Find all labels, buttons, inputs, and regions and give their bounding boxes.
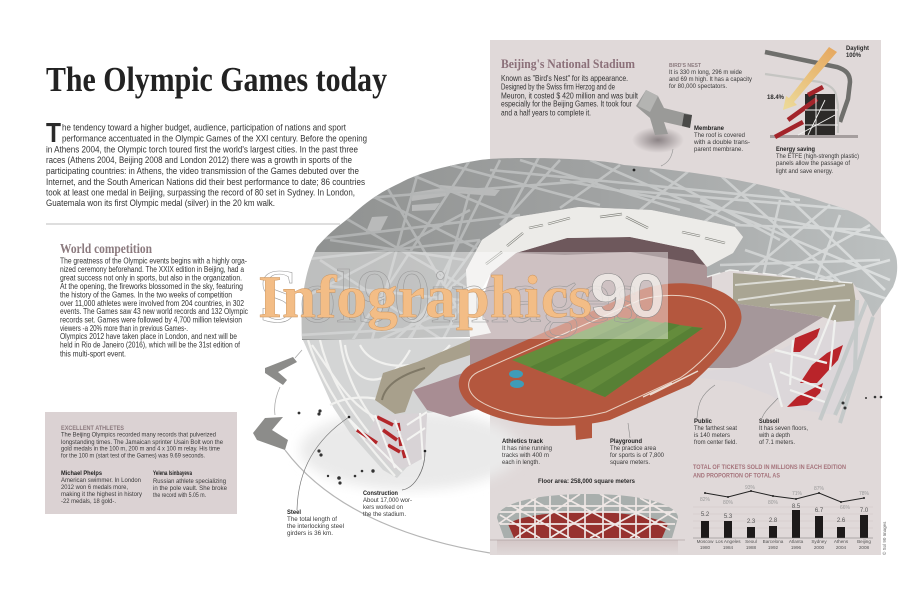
- illustration: stadium cutaway: [300, 155, 897, 478]
- credit: © Sol 90 Images: [881, 521, 887, 555]
- value labels: 7.0: [860, 508, 869, 514]
- athlete: Michael Phelps: making it the highest in history: [61, 491, 143, 498]
- inner white ring: [466, 207, 743, 337]
- label: daylight: Daylight: [846, 45, 869, 52]
- callout: Athletics track: Athletics track: [502, 438, 543, 445]
- callout: Public: is 140 meters: [694, 432, 730, 439]
- percentage labels: 80%: [723, 500, 734, 506]
- value labels: 8.5: [792, 504, 801, 510]
- axis labels: Atlanta: [789, 539, 804, 544]
- text block: World competition: nized ceremony beforehand. The XXIX edition in Beijing, had a: [60, 265, 245, 274]
- axis labels: 2008: [859, 545, 870, 550]
- panel: Beijing's National Stadium background: [490, 40, 881, 555]
- callout: Membrane: with a double trans-: [693, 139, 750, 146]
- athlete: Yelena Isinbayeva: Yelena Isinbayeva: [153, 470, 192, 477]
- axis labels: Athens: [834, 539, 849, 544]
- percentage labels: 71%: [792, 491, 803, 497]
- text block: stadium description: Meuron, it costed $ 420 million and was built: [501, 92, 639, 100]
- panel: Excellent athletes: for the 100 m (start test of the Games) was 9.69 seconds.: [61, 452, 205, 460]
- callout: Subsoil: Subsoil: [759, 418, 779, 425]
- right facade structure: [700, 300, 873, 423]
- label: 18.4%: 18.4%: [767, 94, 784, 101]
- track extension: [575, 414, 592, 440]
- athlete: Michael Phelps: 2012 won 6 medals more,: [61, 484, 128, 491]
- callout: Energy saving: light and save energy.: [776, 168, 833, 175]
- callout: Steel: the interlocking steel: [287, 523, 344, 530]
- watermark: Sol90images: [258, 255, 640, 339]
- callout: Athletics track: tracks with 400 m: [502, 452, 549, 459]
- text block: stadium description: Known as "Bird's Nest" for its appearance.: [501, 74, 628, 83]
- text block: World competition: viewers -a 20% more than in previous Games-.: [60, 324, 188, 333]
- roof edge highlight, right: [707, 270, 853, 283]
- callout: Subsoil: It has seven floors,: [759, 425, 808, 432]
- axis labels: 1980: [700, 545, 711, 550]
- text block: World competition: records set. Games were followed by 4,700 million television: [60, 316, 242, 324]
- label: floor area: Floor area: 258,000 square meters: [538, 478, 635, 485]
- callout: Public: Public: [694, 418, 712, 425]
- value labels: 5.3: [724, 514, 733, 520]
- text block: World competition: great success not only in sports, but also in the organization.: [60, 274, 242, 282]
- callout: Construction: the the stadium.: [363, 511, 406, 518]
- text block: World competition: Olympics 2012 have taken place in London, and next will be: [60, 332, 238, 341]
- callout: Public: from center field.: [694, 439, 737, 446]
- title: The Olympic Games today: [46, 60, 387, 99]
- callout: Athletics track: It has nine running: [502, 445, 552, 452]
- percentage labels: 80%: [768, 500, 779, 506]
- trend line: [705, 491, 864, 502]
- athlete: Yelena Isinbayeva: in the pole vault. She broke: [153, 485, 227, 492]
- diagram: energy saving cross-section: [765, 45, 869, 138]
- callout: Playground: square meters.: [610, 459, 650, 466]
- percentage labels: 87%: [814, 486, 825, 492]
- axis labels: Sydney: [811, 539, 827, 544]
- chart: tickets sold and proportion: AND PROPORTION OF TOTAL AS: [693, 472, 780, 480]
- chart title: TOTAL OF TICKETS SOLD IN MILLIONS IN EACH EDITION: [693, 464, 846, 471]
- callout: Subsoil: [758, 398, 808, 446]
- callout: Playground: The practice area: [610, 445, 656, 452]
- callout: Public: [694, 385, 737, 446]
- text block: World competition: this multi-sport event.: [60, 350, 126, 358]
- athlete: Yelena Isinbayeva: the record with 5.05 m.: [153, 492, 206, 499]
- text block: introduction: Guatemala won its first Olympic medal (silver) in the 20 km walk.: [46, 198, 275, 209]
- callout: Athletics track: each in length.: [502, 459, 540, 466]
- percentage labels: 93%: [745, 485, 756, 491]
- text block: World competition: events. The Games saw 43 new world records and 132 Olympic: [60, 307, 248, 316]
- text block: stadium description: [501, 74, 639, 118]
- text block: introduction: [46, 117, 367, 209]
- athlete: Michael Phelps: [61, 470, 143, 505]
- field: [512, 317, 703, 397]
- panel: Excellent athletes: The Beijing Olympics recorded many records that pulverized: [61, 432, 216, 438]
- watermark: Infographics: [258, 264, 592, 330]
- text block: World competition: held in Rio de Janeiro (2016), which will be the 31st edition of: [60, 340, 241, 350]
- diagram: energy saving cross-section: 100%: [846, 52, 861, 59]
- text block: stadium description: and a half years to complete it.: [501, 108, 591, 118]
- callout: Playground: for sports is of 7,800: [610, 452, 664, 459]
- axis labels: Moscow: [697, 539, 714, 544]
- athlete: Yelena Isinbayeva: Russian athlete specializing: [153, 478, 226, 485]
- percentage labels: [700, 485, 870, 511]
- text block: World competition: the history of the Games. In the two weeks of competition: [60, 290, 232, 300]
- seating bowl: [413, 237, 823, 417]
- callout: Membrane: [633, 125, 750, 171]
- percentage labels: 82%: [700, 497, 711, 503]
- lattice roof: [302, 158, 898, 340]
- running track: [459, 283, 742, 440]
- athlete: Michael Phelps: -22 medals, 18 gold-.: [61, 498, 116, 505]
- callout: Public: The farthest seat: [694, 425, 737, 432]
- panel: ground shadow beneath stadium: [300, 410, 520, 490]
- left facade structure: [302, 338, 480, 478]
- axis labels: [697, 539, 871, 550]
- axis labels: 1996: [791, 545, 802, 550]
- drop cap: T: [46, 117, 61, 148]
- text block: introduction: participating countries: in Athens, the video transmission of the Games debuted over the: [46, 166, 359, 177]
- percentage labels: 78%: [859, 491, 870, 497]
- callout: Construction: [363, 450, 426, 518]
- text block: World competition: The greatness of the Olympic events begins with a highly orga-: [60, 256, 247, 266]
- value labels: 2.6: [837, 518, 846, 524]
- callout: Subsoil: with a depth: [758, 432, 790, 439]
- panel: Excellent athletes: longstanding times. The Jamaican sprinter Usain Bolt won the: [61, 439, 223, 446]
- text block: introduction: Internet, and the South American Nations did their best performance to date; 86 countries: [46, 177, 365, 188]
- value labels: 6.7: [815, 508, 824, 514]
- icon: steel beams: [253, 350, 302, 450]
- people on the plaza: [298, 396, 882, 485]
- blue shelters: [509, 370, 523, 378]
- callout: Energy saving: Energy saving: [776, 146, 815, 153]
- callout: Membrane: The roof is covered: [694, 132, 745, 139]
- callout: Bird's nest: [669, 63, 753, 90]
- callout: Energy saving: [776, 146, 859, 175]
- callout: Membrane: parent membrane.: [694, 146, 743, 153]
- callout: Construction: Construction: [363, 490, 398, 497]
- callout: Steel: The total length of: [287, 516, 337, 523]
- axis labels: 2004: [836, 545, 847, 550]
- callout: Bird's nest: BIRD'S NEST: [669, 63, 702, 69]
- percentage labels: 66%: [840, 505, 851, 511]
- callout: Bird's nest: It is 330 m long, 296 m wide: [669, 69, 742, 76]
- callout: Construction: About 17,000 wor-: [363, 497, 412, 504]
- axis labels: 2000: [814, 545, 825, 550]
- athlete: Michael Phelps: Michael Phelps: [61, 470, 102, 477]
- bars: [701, 510, 868, 538]
- axis labels: 1984: [723, 545, 734, 550]
- callout: Steel: [287, 416, 350, 537]
- axis labels: 1988: [746, 545, 757, 550]
- text block: stadium description: Designed by the Swiss firm Herzog and de: [501, 82, 615, 92]
- callout: Membrane: Membrane: [694, 125, 724, 132]
- axis labels: Beijing: [857, 539, 871, 544]
- axis labels: Seoul: [745, 539, 757, 544]
- value labels: 5.2: [701, 512, 710, 518]
- axis labels: 1992: [768, 545, 779, 550]
- callout: Bird's nest: and 69 m high. It has a capacity: [669, 76, 753, 83]
- callout: Subsoil: of 7.1 meters.: [759, 439, 795, 446]
- callout: Steel: girders is 36 km.: [287, 530, 333, 537]
- axis labels: Barcelona: [763, 539, 784, 544]
- athlete: Michael Phelps: American swimmer. In London: [61, 477, 141, 484]
- callout: Energy saving: panels allow the passage of: [776, 160, 850, 167]
- text block: World competition: [60, 242, 248, 358]
- watermark: 90: [590, 262, 665, 331]
- heading: Beijing's National Stadium: Beijing's National Stadium: [501, 56, 635, 71]
- callout: Playground: Playground: [610, 438, 642, 445]
- athlete: Yelena Isinbayeva: [153, 470, 227, 499]
- callout: Athletics track: [502, 438, 552, 466]
- text block: introduction: performance accentuated in the Olympic Games of the XXI century. Before the opening: [62, 134, 367, 144]
- callout: Construction: kers worked on: [363, 504, 403, 511]
- value labels: [701, 504, 869, 525]
- axis labels: Los Angeles: [715, 539, 741, 544]
- text block: introduction: in Athens 2004, the Olympic torch toured first the world's largest cities. In the past three: [46, 144, 358, 156]
- text block: introduction: took at least one medal in Beijing, surpassing the record of 80 set in Sydney. In London,: [46, 188, 355, 198]
- icon: steel girder joint: [632, 90, 692, 153]
- text block: introduction: races (Athens 2004, Beijing 2008 and London 2012) there was a growth in sports of the: [46, 155, 352, 166]
- illustration: stadium exterior elevation: [490, 494, 685, 548]
- panel: Excellent athletes: [45, 412, 237, 514]
- chart: tickets sold and proportion: [693, 464, 873, 550]
- heading: World competition: [60, 242, 152, 257]
- text block: introduction: he tendency toward a higher budget, audience, participation of nations and sport: [62, 122, 346, 134]
- vaults under roof: [375, 273, 860, 414]
- icon: sweeping ground curve: [285, 450, 490, 553]
- heading: excellent athletes: EXCELLENT ATHLETES: [61, 425, 124, 432]
- callout: Bird's nest: for 80,000 spectators.: [669, 83, 727, 90]
- callout: Energy saving: The ETFE (high-strength plastic): [776, 153, 859, 160]
- text block: stadium description: especially for the Beijing Games. It took four: [501, 100, 632, 108]
- callout: Steel: Steel: [287, 509, 301, 516]
- value labels: 2.3: [747, 519, 756, 525]
- text block: World competition: At the opening, the fireworks blossomed in the sky, featuring: [60, 282, 243, 291]
- callout: Playground: [610, 423, 664, 466]
- panel: Excellent athletes: gold medals in the 100 m, 200 m and 4 x 100 m relay. His time: [61, 446, 220, 452]
- text block: World competition: over 11,000 athletes were involved from 204 countries, in 302: [60, 299, 244, 308]
- value labels: 2.8: [769, 518, 778, 524]
